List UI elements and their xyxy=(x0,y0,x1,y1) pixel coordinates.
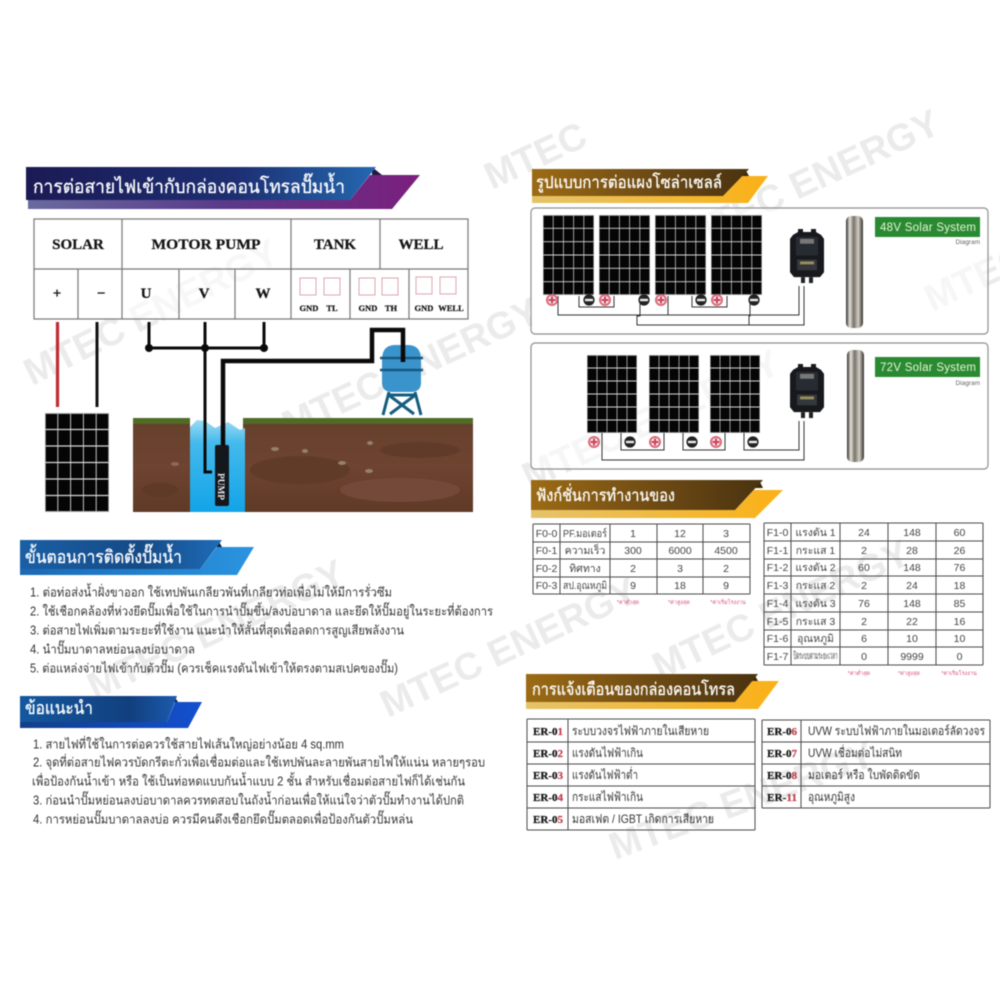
solar cables xyxy=(58,322,97,407)
table: F1 parameters: 24 xyxy=(858,527,870,539)
wiring terminal table: GND xyxy=(300,303,318,313)
table: F0 parameters: ความเร็ว xyxy=(565,543,606,557)
table: F0 parameters: สป.อุณหภูมิ xyxy=(563,580,607,592)
heading banner: install steps xyxy=(20,540,254,575)
table: F0 parameters: 9 xyxy=(630,580,636,592)
heading banner: function levels xyxy=(531,480,783,518)
table: F0 parameters: ทิศทาง xyxy=(569,563,601,575)
table: error codes left: ER-05 xyxy=(533,815,563,826)
table: F1 parameters: กระแส 1 xyxy=(796,545,835,557)
heading banner: function levels: ฟังก์ชั่นการทำงานของ xyxy=(536,483,675,505)
table: F1 parameters: 0 xyxy=(861,651,867,663)
table: F0 parameters: *ค่าต่ำสุด xyxy=(617,598,640,606)
table: F0 parameters: F0-1 xyxy=(536,545,557,557)
table: error codes right: ER-07 xyxy=(767,749,797,760)
table: F1 parameters: 148 xyxy=(903,598,921,610)
table: F1 parameters: 2 xyxy=(861,616,867,628)
table: error codes left: ER-03 xyxy=(533,771,563,782)
advice list: 4. การหย่อนปั๊มบาดาลลงบ่อ ควรมีคนดึงเชือกยึดปั๊มตลอดเพื่อป้องกันตัวปั๊มหล่น xyxy=(33,810,413,826)
table: F1 parameters: 0 xyxy=(957,651,963,663)
table: F1 parameters: 22 xyxy=(906,616,918,628)
table: F1 parameters: กระแส 3 xyxy=(796,616,835,628)
table: error codes left xyxy=(527,719,755,830)
panel: 72V solar system: Diagram xyxy=(955,380,980,387)
install steps list: 4. นำปั๊มบาดาลหย่อนลงบ่อบาดาล xyxy=(30,640,195,656)
table: F1 parameters: แรงดัน 3 xyxy=(795,598,836,610)
wiring terminal table: SOLAR xyxy=(52,237,104,253)
ground: right soil xyxy=(243,418,473,512)
table: F1 parameters: *ค่าต่ำสุด xyxy=(848,669,871,677)
table: F1 parameters xyxy=(764,523,983,677)
table: F1 parameters: แรงดัน 1 xyxy=(795,527,836,539)
table: F0 parameters: 3 xyxy=(677,563,683,575)
table: error codes right: UVW เชื่อมต่อไม่สนิท xyxy=(808,744,902,760)
table: F1 parameters: 148 xyxy=(903,562,921,574)
table: error codes left: ER-04 xyxy=(533,793,564,804)
table: F1 parameters: *ค่าเริ่มโรงงาน xyxy=(941,669,977,677)
heading banner: wiring: การต่อสายไฟเข้ากับกล่องคอนโทรลปั๊มน้ำ xyxy=(33,173,345,198)
water tank xyxy=(380,345,423,415)
wiring terminal table: + xyxy=(53,286,61,302)
advice list: 2. จุดที่ต่อสายไฟควรบัดกรีตะกั่วเพื่อเชื่อมต่อและใช้เทปพันละลายพันสายไฟให้แน่น หลายๆรอบ xyxy=(33,754,485,770)
heading banner: advice: ข้อแนะนำ xyxy=(25,698,93,718)
table: error codes right xyxy=(762,720,990,808)
table: error codes right: ER-11 xyxy=(767,793,797,804)
table: error codes left: ER-02 xyxy=(533,749,563,760)
table: F1 parameters: แรงดัน 2 xyxy=(795,562,836,574)
wiring terminal table xyxy=(34,219,468,319)
panel: 72V solar system xyxy=(531,343,988,469)
table: error codes right: ER-08 xyxy=(767,771,797,782)
watermarks: MTEC xyxy=(478,115,593,198)
heading banner: alerts: การแจ้งเตือนของกล่องคอนโทรล xyxy=(532,679,735,699)
table: F1 parameters: 9999 xyxy=(900,651,924,663)
heading banner: solar layouts: รูปแบบการต่อแผงโซล่าเซลล์ xyxy=(536,172,722,193)
table: F1 parameters: F1-7 xyxy=(767,651,788,663)
ground: left soil xyxy=(133,418,190,512)
table: F0 parameters: 3 xyxy=(723,528,729,540)
panel: 72V solar system: 72V Solar System xyxy=(880,362,976,374)
advice list: 1. สายไฟที่ใช้ในการต่อควรใช้สายไฟเส้นใหญ่อย่างน้อย 4 sq.mm xyxy=(33,736,344,752)
wiring terminal table: GND xyxy=(359,303,377,313)
table: F1 parameters: 2 xyxy=(861,580,867,592)
table: F1 parameters: 28 xyxy=(906,545,918,557)
table: F0 parameters: *ค่าสูงสุด xyxy=(668,599,690,606)
table: F1 parameters: F1-1 xyxy=(767,545,788,557)
wiring terminal table: WELL xyxy=(438,303,464,313)
watermarks: MTEC ENERGY xyxy=(604,734,880,868)
wiring terminal table: TL xyxy=(326,303,338,313)
table: F1 parameters: F1-2 xyxy=(767,562,788,574)
watermarks: MTEC ENERGY xyxy=(676,102,946,258)
table: F0 parameters: 12 xyxy=(674,528,686,540)
table: error codes left: ระบบวงจรไฟฟ้าภายในเสียหาย xyxy=(572,724,709,738)
watermarks: MTEC ENERGY xyxy=(276,290,546,446)
delivery pipe xyxy=(223,330,403,452)
submersible pump xyxy=(215,445,229,506)
watermarks: MTEC ENERGY xyxy=(646,532,916,688)
table: F1 parameters: F1-3 xyxy=(767,580,788,592)
table: error codes left: แรงดันไฟฟ้าเกิน xyxy=(572,746,643,760)
table: error codes left: มอสเฟต / IGBT เกิดการเสียหาย xyxy=(572,812,714,826)
heading banner: wiring xyxy=(26,167,420,209)
table: F1 parameters: 26 xyxy=(954,545,965,557)
wiring terminal table: TH xyxy=(385,303,398,313)
wiring terminal table: WELL xyxy=(398,237,444,253)
table: F1 parameters: *ค่าสูงสุด xyxy=(898,670,920,677)
table: F1 parameters: 85 xyxy=(954,598,965,610)
table: F0 parameters: PF.มอเตอร์ xyxy=(563,527,607,540)
table: F1 parameters: 16 xyxy=(954,616,965,628)
wiring terminal table: V xyxy=(199,286,210,302)
table: F1 parameters: กระแส 2 xyxy=(796,580,835,592)
table: F0 parameters: 1 xyxy=(630,528,636,540)
table: F0 parameters: 18 xyxy=(674,580,686,592)
solar panel xyxy=(45,413,109,512)
wiring terminal table: GND xyxy=(415,303,433,313)
table: F1 parameters: 10 xyxy=(954,633,965,645)
table: F0 parameters: F0-2 xyxy=(536,563,557,575)
advice list xyxy=(32,736,485,826)
table: F1 parameters: 6 xyxy=(861,633,867,645)
install steps list: 1. ต่อท่อส่งน้ำฝั่งขาออก ใช้เทปพันเกลียวพันที่เกลียวท่อเพื่อไม่ให้มีการรั่วซึม xyxy=(30,582,392,600)
heading banner: alerts xyxy=(526,674,779,709)
wiring terminal table: U xyxy=(141,286,152,302)
install steps list: 3. ต่อสายไฟเพิ่มตามระยะที่ใช้งาน แนะนำให้สั้นที่สุดเพื่อลดการสูญเสียพลังงาน xyxy=(30,620,404,638)
table: F1 parameters: 18 xyxy=(954,580,965,592)
table: F1 parameters: 76 xyxy=(954,562,965,574)
panel: 48V solar system: 48V Solar System xyxy=(880,222,976,234)
table: error codes left: แรงดันไฟฟ้าต่ำ xyxy=(572,766,638,782)
table: F1 parameters: อุณหภูมิ xyxy=(797,633,834,645)
advice list: เพื่อป้องกันน้ำเข้า หรือ ใช้เป็นท่อหดแบบกันน้ำแบบ 2 ชั้น สำหรับเชื่อมต่อสายไฟก็ได้เช่นกัน xyxy=(32,772,465,788)
table: F1 parameters: F1-4 xyxy=(767,598,788,610)
table: F0 parameters: F0-0 xyxy=(536,528,557,540)
wiring terminal table: W xyxy=(256,286,270,302)
table: F1 parameters: F1-6 xyxy=(767,633,788,645)
well water xyxy=(190,420,245,512)
table: F0 parameters: 300 xyxy=(624,545,642,557)
watermarks: MTEC ENERGY xyxy=(374,570,644,726)
table: F1 parameters: 60 xyxy=(858,562,870,574)
panel: 48V solar system xyxy=(531,208,988,334)
watermarks: MTEC ENERGY xyxy=(516,342,786,498)
table: F1 parameters: 24 xyxy=(906,580,918,592)
table: F0 parameters: 6000 xyxy=(668,545,692,557)
table: F1 parameters: 2 xyxy=(861,545,867,557)
watermarks: MTEC ENERGY xyxy=(17,232,285,394)
table: F0 parameters: F0-3 xyxy=(536,580,557,592)
table: F1 parameters: 10 xyxy=(906,633,918,645)
wiring terminal table: − xyxy=(97,286,105,302)
install steps list: 2. ใช้เชือกคล้องที่ห่วงยึดปั๊มเพื่อใช้ในการนำปั๊มขึ้น/ลงบ่อบาดาล และยึดให้ปั๊มอยู่ในระยะที่ต้องการ xyxy=(30,602,493,620)
motor cables xyxy=(146,322,266,472)
table: F0 parameters: *ค่าเริ่มโรงงาน xyxy=(710,598,746,606)
table: F0 parameters: 2 xyxy=(630,563,636,575)
table: F0 parameters: 2 xyxy=(723,563,729,575)
advice list: 3. ก่อนนำปั๊มหย่อนลงบ่อบาดาลควรทดสอบในถังน้ำก่อนเพื่อให้แน่ใจว่าตัวปั๊มทำงานได้ปกติ xyxy=(33,790,464,808)
install steps list xyxy=(30,582,493,676)
table: F1 parameters: 148 xyxy=(903,527,921,539)
table: F0 parameters: 4500 xyxy=(714,545,738,557)
submersible pump: PUMP xyxy=(216,473,226,501)
table: F0 parameters: 9 xyxy=(723,580,729,592)
heading banner: solar layouts xyxy=(532,169,768,203)
watermarks xyxy=(17,102,1000,868)
table: error codes right: มอเตอร์ หรือ ใบพัดติดขัด xyxy=(808,768,920,782)
heading banner: advice xyxy=(20,696,202,728)
table: F1 parameters: 76 xyxy=(858,598,870,610)
watermarks: MTEC ENERGY xyxy=(81,552,351,708)
table: F1 parameters: F1-0 xyxy=(767,527,788,539)
wiring terminal table: MOTOR PUMP xyxy=(152,237,260,253)
table: F0 parameters xyxy=(533,524,750,606)
install steps list: 5. ต่อแหล่งจ่ายไฟเข้ากับตัวปั๊ม (ควรเช็คแรงดันไฟเข้าให้ตรงตามสเปคของปั๊ม) xyxy=(30,658,398,676)
wiring terminal table: TANK xyxy=(314,237,356,253)
table: F1 parameters: 60 xyxy=(954,527,965,539)
table: F1 parameters: ปิดระบบตามระยะเวลา xyxy=(793,650,838,662)
table: error codes left: กระแสไฟฟ้าเกิน xyxy=(572,790,643,804)
table: error codes right: อุณหภูมิสูง xyxy=(808,790,855,805)
table: error codes right: ER-06 xyxy=(767,727,797,738)
table: error codes left: ER-01 xyxy=(533,727,563,738)
heading banner: install steps: ขั้นตอนการติดตั้งปั๊มน้ำ xyxy=(25,543,182,567)
panel: 48V solar system: Diagram xyxy=(955,239,980,246)
table: F1 parameters: F1-5 xyxy=(767,616,788,628)
